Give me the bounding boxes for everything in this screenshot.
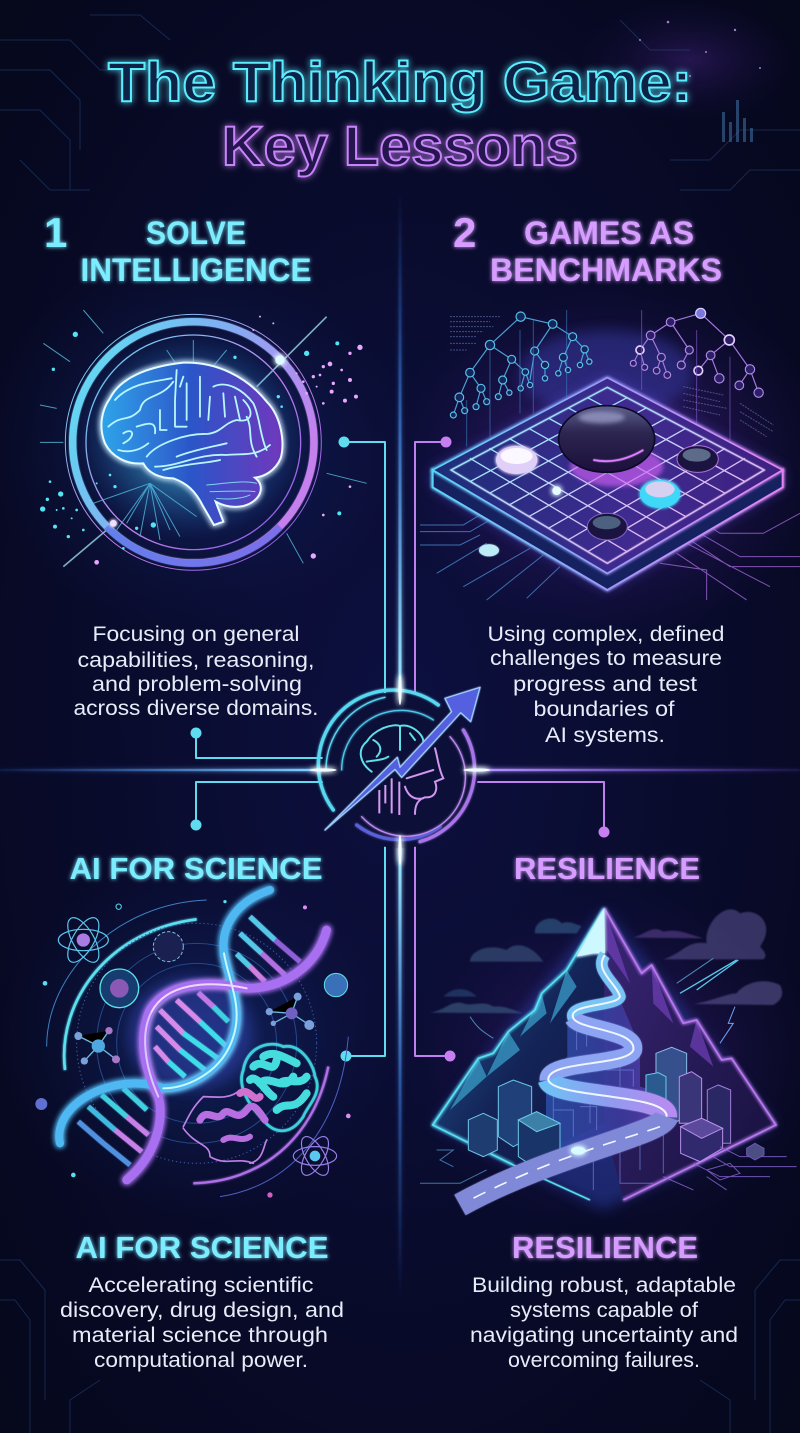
section heading 5: ai for science lower: AI FOR SCIENCE — [76, 1230, 328, 1265]
head profile icon — [405, 748, 443, 814]
body text: ai for science — [60, 1274, 344, 1372]
body text: resilience: overcoming failures. — [508, 1349, 700, 1372]
section heading 1: solve intelligence: INTELLIGENCE — [80, 252, 312, 288]
purple glow under centre stone — [570, 447, 663, 487]
connector: resilience upper — [475, 782, 610, 838]
body text: games as benchmarks: challenges to measure — [490, 647, 722, 670]
body text: resilience: navigating uncertainty and — [470, 1324, 738, 1347]
body text: games as benchmarks: Using complex, defined — [488, 623, 724, 646]
buildings — [468, 1047, 731, 1167]
stones — [496, 406, 718, 540]
body text: solve intelligence: Focusing on general — [92, 623, 300, 646]
illustration: dna and molecules — [35, 890, 351, 1198]
lower road wall lines — [553, 1030, 663, 1190]
section heading 1: solve intelligence: 1 — [44, 209, 67, 256]
body text: solve intelligence: and problem-solving — [92, 673, 302, 696]
road walls — [546, 1000, 674, 1167]
white stone — [496, 446, 537, 474]
brain folds — [108, 370, 270, 499]
section heading 4: resilience: RESILIENCE — [514, 851, 700, 886]
mountain glow — [433, 908, 776, 1210]
body text: games as benchmarks — [488, 623, 724, 747]
circuits under platform — [420, 1143, 797, 1190]
body text: ai for science: discovery, drug design, and — [60, 1299, 344, 1322]
purple ridges — [604, 908, 713, 1067]
connector: ai for science upper — [190, 782, 325, 830]
large dark stone — [559, 406, 655, 472]
body text: ai for science: Accelerating scientific — [88, 1274, 314, 1297]
node flares — [310, 675, 490, 865]
body text: resilience: Building robust, adaptable — [472, 1274, 736, 1297]
connector: solve intelligence — [338, 436, 385, 693]
body text: games as benchmarks: progress and test — [513, 673, 697, 696]
orbit rings — [47, 900, 348, 1197]
atom lower right — [293, 1133, 337, 1179]
data particles — [40, 316, 363, 565]
bars icon — [379, 778, 399, 815]
board surface — [433, 378, 783, 573]
clouds and storm — [430, 909, 782, 1043]
central dna glow — [127, 977, 253, 1090]
body text: solve intelligence — [74, 623, 318, 720]
atom upper left — [58, 913, 108, 967]
body text: ai for science: computational power. — [94, 1349, 308, 1372]
section heading 2: games as benchmarks — [453, 209, 722, 288]
connector: ai for science lower — [340, 843, 385, 1062]
brain glow — [73, 333, 307, 540]
brain cerebrum and cerebellum — [101, 363, 282, 525]
cyan stone — [640, 480, 680, 508]
atoms — [58, 913, 337, 1179]
mountain right face — [604, 908, 776, 1200]
illustration: mountain with road — [420, 908, 797, 1210]
hub rings — [318, 690, 475, 842]
section heading 2: games as benchmarks: 2 — [453, 209, 476, 256]
board outer glow — [433, 378, 783, 590]
road headlight — [571, 1147, 586, 1155]
winding road — [460, 955, 667, 1205]
mountain outline — [433, 908, 604, 1165]
glow above board — [520, 330, 693, 417]
body text: games as benchmarks: AI systems. — [545, 724, 665, 747]
connector: solve intelligence lower — [190, 728, 325, 758]
connector lines — [0, 190, 800, 1300]
code text marks — [450, 317, 773, 437]
dna strands — [59, 890, 327, 1180]
title — [108, 50, 692, 177]
body text: resilience: systems capable of — [510, 1299, 698, 1322]
body text: resilience — [470, 1274, 738, 1372]
board grid — [451, 387, 764, 563]
small light pad — [479, 544, 499, 556]
section heading 1: solve intelligence: SOLVE — [146, 215, 246, 251]
rising arrow — [325, 687, 480, 830]
board slab side — [433, 470, 783, 590]
decision tree: purple — [630, 308, 763, 397]
rings — [65, 314, 321, 570]
body text: ai for science: material science through — [72, 1324, 328, 1347]
section heading 1: solve intelligence — [44, 209, 312, 288]
starburst rays — [40, 310, 367, 567]
dark stone right — [677, 446, 718, 472]
glowing point — [552, 486, 561, 495]
cells and molecules — [35, 900, 351, 1198]
central hub icon — [310, 675, 490, 865]
connector: games as benchmarks — [415, 436, 452, 693]
brain outline icon — [361, 725, 423, 772]
title: The Thinking Game: — [108, 50, 692, 113]
illustration: go board with stones — [420, 308, 800, 600]
lit ridges — [450, 970, 577, 1110]
protein ribbons — [183, 1044, 317, 1163]
dark stone bottom — [587, 513, 627, 540]
circuit traces under board — [420, 513, 800, 600]
snowy peak — [577, 908, 605, 957]
section heading 2: games as benchmarks: BENCHMARKS — [490, 252, 722, 288]
dna rungs — [78, 917, 300, 1165]
section heading 6: resilience lower: RESILIENCE — [512, 1230, 698, 1265]
central horizontal beam — [0, 769, 800, 771]
decision tree: cyan — [450, 312, 592, 418]
faint light columns — [467, 310, 730, 447]
illustration: brain in ring — [40, 310, 367, 570]
connector: resilience lower — [415, 843, 456, 1062]
title: Key Lessons — [222, 114, 578, 177]
body text: solve intelligence: capabilities, reasoning, — [78, 649, 314, 672]
body text: solve intelligence: across diverse domains. — [74, 697, 318, 720]
section heading 2: games as benchmarks: GAMES AS — [524, 215, 694, 251]
section heading 3: ai for science: AI FOR SCIENCE — [70, 851, 322, 886]
central vertical beam — [398, 190, 402, 1300]
mountain left face — [433, 908, 604, 1165]
body text: games as benchmarks: boundaries of — [534, 698, 675, 721]
